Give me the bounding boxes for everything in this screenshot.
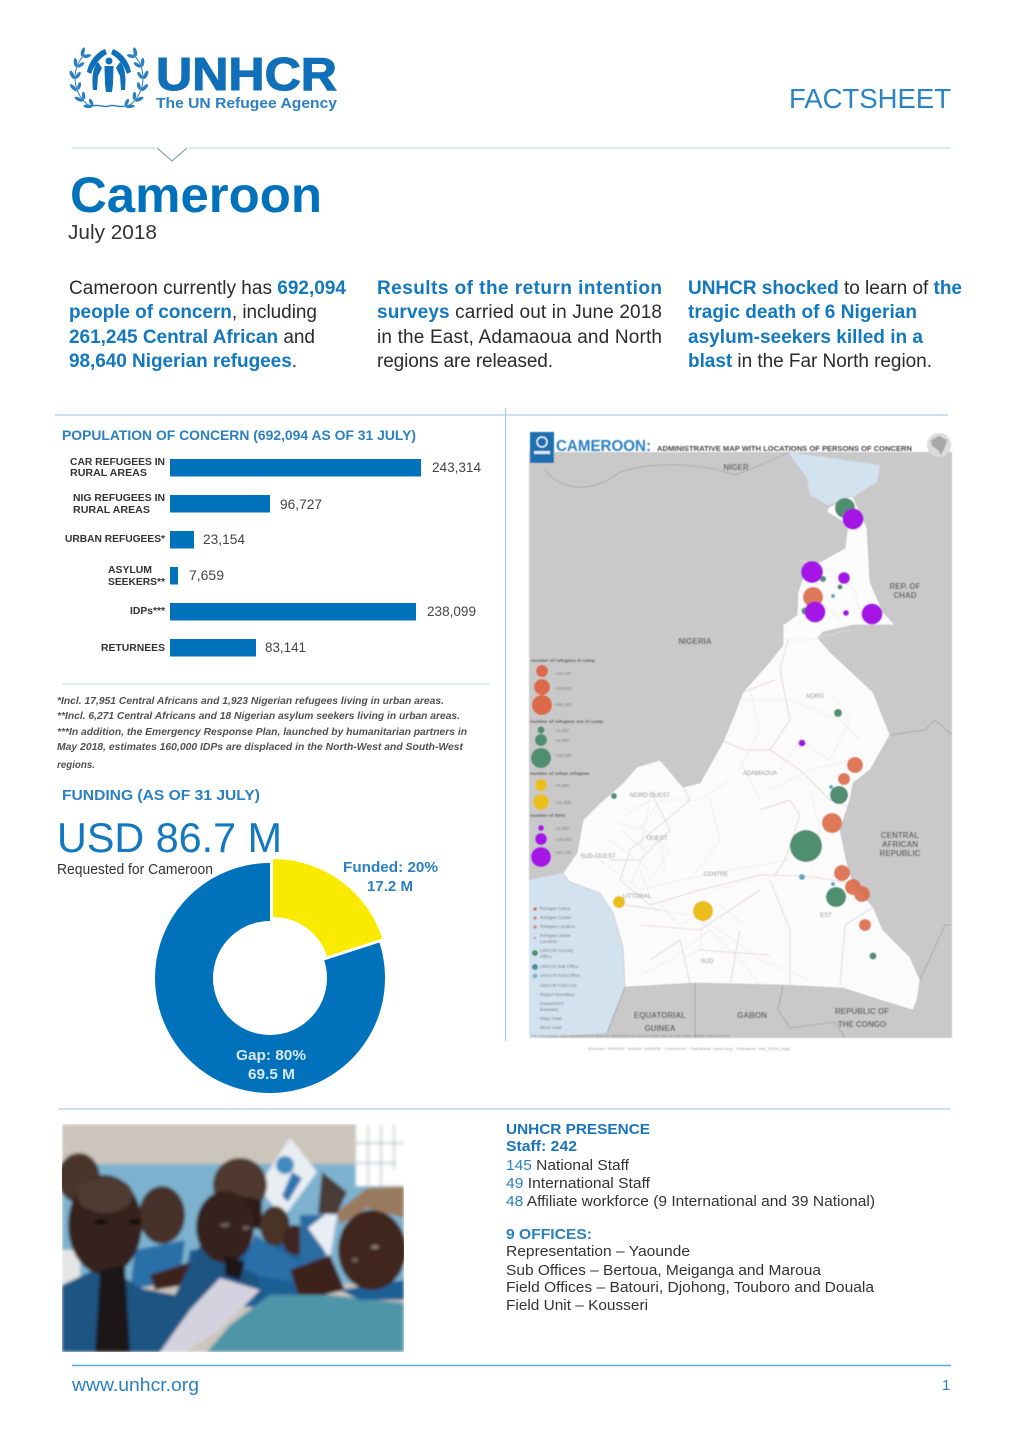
region boundaries <box>610 640 873 985</box>
map legend: symbols <box>532 906 581 1030</box>
bar: urban refugees <box>65 531 245 548</box>
map legend: symbols: boundary <box>540 1007 560 1012</box>
urban refugee circles <box>613 896 713 921</box>
bar: asylum seekers: SEEKERS** <box>108 576 166 588</box>
text block: blast in Far North: asylum-seekers killed in a <box>688 327 923 348</box>
country labels: GABON <box>737 1011 767 1020</box>
office list: Field Offices – Batouri, Djohong, Touboro and Douala <box>506 1279 875 1296</box>
map legend: proportional circles: number of refugees in camp <box>531 658 595 664</box>
logo: UNHCR <box>69 47 337 112</box>
text block: return intention surveys: in the East, Adamaoua and North <box>377 327 662 348</box>
region labels: LITTORAL <box>623 894 652 900</box>
country labels: THE CONGO <box>838 1020 886 1029</box>
donut chart: funded versus gap: 17.2 M <box>367 879 413 895</box>
country labels <box>634 463 921 1033</box>
country labels: AFRICAN <box>882 840 918 849</box>
map legend: symbols: UNHCR Sub Office <box>540 964 579 969</box>
map legend: proportional circles: <9,000 <box>555 738 569 743</box>
map legend: symbols: Refugee Urban <box>540 933 571 938</box>
map legend: symbols: Refugee Center <box>540 915 572 920</box>
footnotes: ***In addition, the Emergency Response Plan, launched by humanitarian partners in <box>57 726 467 738</box>
caption: requested for Cameroon: Requested for Cameroon <box>57 862 213 878</box>
map legend: symbols: Region boundary <box>540 992 575 997</box>
text block: UNHCR presence <box>506 1121 875 1314</box>
borders between neighbouring countries <box>607 720 952 1038</box>
region labels: SUD <box>701 959 714 965</box>
footnotes: **Incl. 6,271 Central Africans and 18 Nigerian asylum seekers living in urban areas. <box>57 710 460 722</box>
panel: map of Cameroon <box>529 432 952 1051</box>
lake Chad <box>788 452 880 505</box>
bar: NIG refugees in rural areas: NIG REFUGEES IN <box>73 492 165 504</box>
bar: asylum seekers: ASYLUM <box>108 564 152 576</box>
map title block <box>530 432 951 463</box>
region labels: ADAMAOUA <box>743 771 777 777</box>
bar: returnees: RETURNEES <box>101 642 165 654</box>
panel: funding <box>57 788 438 1093</box>
bar: returnees <box>101 639 306 656</box>
text block: key figures <box>69 278 346 372</box>
footnotes: *Incl. 17,951 Central Africans and 1,923 Nigerian refugees living in urban areas. <box>57 695 444 707</box>
donut chart: funded versus gap: 69.5 M <box>248 1067 295 1083</box>
bar: asylum seekers: 7,659 <box>189 568 224 583</box>
Cameroon territory <box>563 497 920 1010</box>
map subtitle: ADMINISTRATIVE MAP WITH LOCATIONS OF PERSONS OF CONCERN <box>657 446 912 453</box>
map legend: proportional circles: <15,000 <box>555 686 572 691</box>
map legend: proportional circles: <5,000 <box>555 826 569 831</box>
map base <box>529 452 952 1038</box>
country labels: REPUBLIC <box>880 849 921 858</box>
wordmark UNHCR: UNHCR <box>156 48 337 100</box>
map legend: symbols: UNHCR Country <box>540 948 574 953</box>
text block: blast in Far North <box>688 278 962 372</box>
donut chart: funded versus gap <box>155 859 438 1093</box>
heading: UNHCR presence: UNHCR PRESENCE <box>506 1121 650 1138</box>
tagline: The UN Refugee Agency <box>156 96 337 112</box>
office list <box>506 1243 875 1314</box>
footnotes <box>57 695 467 771</box>
icon: Africa locator globe <box>927 433 951 457</box>
refugee camp circles <box>803 587 871 931</box>
country labels: NIGER <box>723 463 749 472</box>
office list: Field Unit – Kousseri <box>506 1297 648 1314</box>
donut chart: funded versus gap: Funded: 20% <box>343 860 438 876</box>
map title: CAMEROON: <box>556 438 651 455</box>
region labels: NORD <box>806 694 824 700</box>
panel: population of concern <box>57 427 490 771</box>
photo: children with UNHCR flags in classroom <box>58 1120 408 1352</box>
icon: UNHCR square <box>530 432 554 463</box>
bar: urban refugees: URBAN REFUGEES* <box>65 533 166 545</box>
sea: gulf of Guinea <box>529 873 625 1038</box>
staff totals: 49 International Staff <box>506 1175 651 1192</box>
icon: UNHCR laurel wreath and family emblem <box>69 47 149 108</box>
map legend: symbols: Department <box>540 1001 564 1006</box>
text block: blast in Far North: UNHCR shocked to learn of the <box>688 278 962 299</box>
region labels: SUD-OUEST <box>580 854 616 860</box>
text block: blast in Far North: blast in the Far North region. <box>688 351 932 372</box>
bar: returnees: 83,141 <box>265 640 306 655</box>
heading: offices: 9 OFFICES: <box>506 1226 592 1243</box>
map disclaimer and source: Sources: UNHCR · Author: UNHCR · Cameroon · Feedback: unhcr.org · Filename: cmr_2018_map <box>588 1046 791 1051</box>
footnotes: regions. <box>57 759 95 771</box>
heading: funding: FUNDING (AS OF 31 JULY) <box>62 788 260 804</box>
country labels: REPUBLIC OF <box>835 1007 889 1016</box>
bar: CAR refugees in rural areas: 243,314 <box>432 460 481 475</box>
map legend: symbols: UNHCR Field Unit <box>540 983 577 988</box>
text block: key figures: people of concern, including <box>69 302 317 323</box>
title: Cameroon <box>70 167 322 223</box>
map legend: proportional circles: <11,000 <box>555 800 572 805</box>
country labels: REP. OF <box>890 582 921 591</box>
map legend: symbols: Major road <box>540 1016 562 1021</box>
bar: IDPs: IDPs*** <box>130 605 166 617</box>
map legend: proportional circles: number of IDPs <box>530 813 566 819</box>
map legend: symbols: UNHCR Field Office <box>540 973 581 978</box>
map legend: symbols: Refugee Location <box>540 924 576 929</box>
map legend: proportional circles: <15,300 <box>555 753 572 758</box>
staff totals: Staff: 242 <box>506 1138 577 1155</box>
office list: Representation – Yaounde <box>506 1243 690 1260</box>
text block: key figures: 261,245 Central African and <box>69 327 315 348</box>
office list: Sub Offices – Bertoua, Meiganga and Maroua <box>506 1262 822 1279</box>
map legend: symbols: Minor road <box>540 1025 562 1030</box>
map legend: symbols: Office <box>540 954 552 959</box>
country labels: EQUATORIAL <box>634 1011 686 1020</box>
footer: website: www.unhcr.org <box>71 1375 199 1395</box>
map legend: proportional circles: <15,000 <box>555 837 572 842</box>
map disclaimer and source: The boundaries and names shown and the designations used on this map do not imply official endorsement <box>530 1034 730 1038</box>
donut chart: funded versus gap: Gap: 80% <box>236 1048 306 1064</box>
staff totals <box>506 1138 875 1210</box>
staff totals: 145 National Staff <box>506 1157 630 1174</box>
text block: return intention surveys <box>377 278 662 372</box>
region labels: OUEST <box>647 836 668 842</box>
bar: urban refugees: 23,154 <box>203 532 245 547</box>
bar: NIG refugees in rural areas <box>73 492 322 516</box>
bar: IDPs <box>130 603 476 620</box>
country labels: CENTRAL <box>881 831 919 840</box>
region labels <box>580 694 832 965</box>
text block: return intention surveys: Results of the return intention <box>377 278 662 299</box>
big number: requested amount: USD 86.7 M <box>57 814 282 861</box>
UNHCR office markers <box>799 594 835 886</box>
bar: CAR refugees in rural areas: RURAL AREAS <box>70 467 147 479</box>
Niger border <box>545 452 790 487</box>
bar: NIG refugees in rural areas: 96,727 <box>280 497 322 512</box>
text block: return intention surveys: regions are released. <box>377 351 553 372</box>
footer: page number: 1 <box>942 1377 950 1394</box>
region labels: CENTRE <box>704 872 728 878</box>
bar: asylum seekers <box>108 564 224 588</box>
staff totals: 48 Affiliate workforce (9 International and 39 National) <box>506 1193 875 1210</box>
map legend: proportional circles: <60,100 <box>555 850 572 855</box>
chevron pointer <box>157 148 187 161</box>
map legend: proportional circles: <5,000 <box>555 783 569 788</box>
map legend: proportional circles: <5,000 <box>555 728 569 733</box>
bar: CAR refugees in rural areas: CAR REFUGEES IN <box>70 456 165 468</box>
country labels: NIGERIA <box>678 637 712 646</box>
map legend: symbols: Location <box>540 939 558 944</box>
map disclaimer and source <box>530 1034 791 1051</box>
bar chart: population groups <box>65 456 481 656</box>
bar: NIG refugees in rural areas: RURAL AREAS <box>73 504 150 516</box>
text block: key figures: Cameroon currently has 692,094 <box>69 278 346 299</box>
text block: key figures: 98,640 Nigerian refugees. <box>69 351 297 372</box>
region labels: EST <box>820 913 832 919</box>
date: July 2018 <box>68 222 157 244</box>
region labels: NORD-OUEST <box>630 793 670 799</box>
bar: IDPs: 238,099 <box>427 604 476 619</box>
map legend: proportional circles: number of urban refugees <box>530 771 590 777</box>
map legend: proportional circles <box>530 658 603 867</box>
map legend: proportional circles: <60,100 <box>555 702 572 707</box>
country labels: GUINEA <box>644 1024 676 1033</box>
bar: CAR refugees in rural areas <box>70 456 481 479</box>
text block: blast in Far North: tragic death of 6 Nigerian <box>688 302 917 323</box>
IDP circles <box>798 508 882 746</box>
map legend: proportional circles: number of refugees out of camp <box>530 719 603 725</box>
map legend: symbols: Refugee Camp <box>540 906 571 911</box>
text block: return intention surveys: surveys carried out in June 2018 <box>377 302 662 323</box>
country labels: CHAD <box>893 591 917 600</box>
heading: population of concern: POPULATION OF CONCERN (692,094 AS OF 31 JULY) <box>62 427 416 443</box>
map legend: proportional circles: <10,000 <box>555 671 572 676</box>
document type label: FACTSHEET <box>789 83 951 114</box>
footnotes: May 2018, estimates 160,000 IDPs are displaced in the North-West and South-West <box>57 741 463 753</box>
refugees out of camp circles <box>611 498 876 960</box>
